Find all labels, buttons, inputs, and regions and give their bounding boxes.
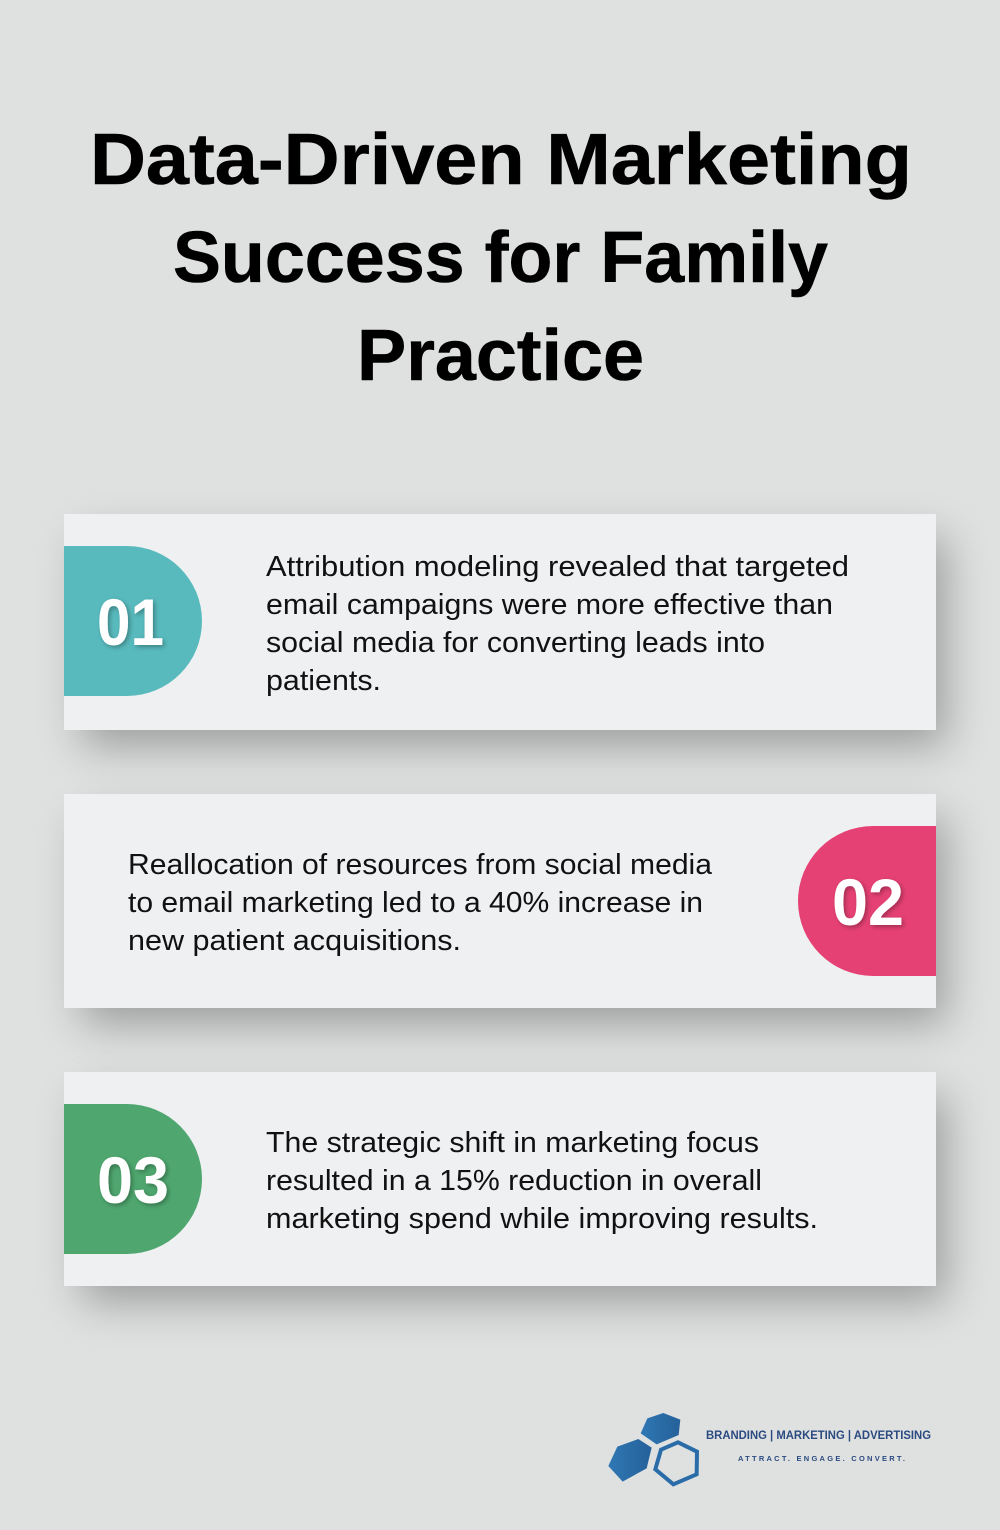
badge 02: 02 <box>832 865 904 939</box>
text block 01: social media for converting leads into <box>266 627 765 659</box>
title: Data-Driven Marketing <box>90 120 912 200</box>
text block 02 <box>128 849 713 957</box>
badge 02 <box>798 826 936 976</box>
logo <box>608 1413 931 1484</box>
text block 03: The strategic shift in marketing focus <box>266 1127 759 1159</box>
badge 03: 03 <box>97 1143 169 1217</box>
text block 01: Attribution modeling revealed that targeted <box>266 551 849 583</box>
panel: card 03 background <box>64 1072 936 1286</box>
icon: hexagons <box>608 1413 697 1484</box>
text block 01: email campaigns were more effective than <box>266 589 833 621</box>
panel: card 02 background <box>64 794 936 1008</box>
text block 03: resulted in a 15% reduction in overall <box>266 1165 762 1197</box>
text block 01 <box>266 551 849 697</box>
logo text: ATTRACT. ENGAGE. CONVERT. <box>738 1454 905 1463</box>
badge 01: 01 <box>97 585 164 659</box>
title: Practice <box>357 316 644 396</box>
text block 02: to email marketing led to a 40% increase in <box>128 887 703 919</box>
panel: card 01 background <box>64 514 936 730</box>
badge 01 <box>64 546 202 696</box>
text block 01: patients. <box>266 665 381 697</box>
text block 03: marketing spend while improving results. <box>266 1203 818 1235</box>
title: Success for Family <box>173 218 828 298</box>
badge 03 <box>64 1104 202 1254</box>
logo text <box>706 1430 931 1463</box>
text block 03 <box>266 1127 818 1235</box>
text block 02: Reallocation of resources from social media <box>128 849 713 881</box>
logo text: BRANDING | MARKETING | ADVERTISING <box>706 1430 931 1442</box>
title <box>90 120 912 396</box>
text block 02: new patient acquisitions. <box>128 925 461 957</box>
